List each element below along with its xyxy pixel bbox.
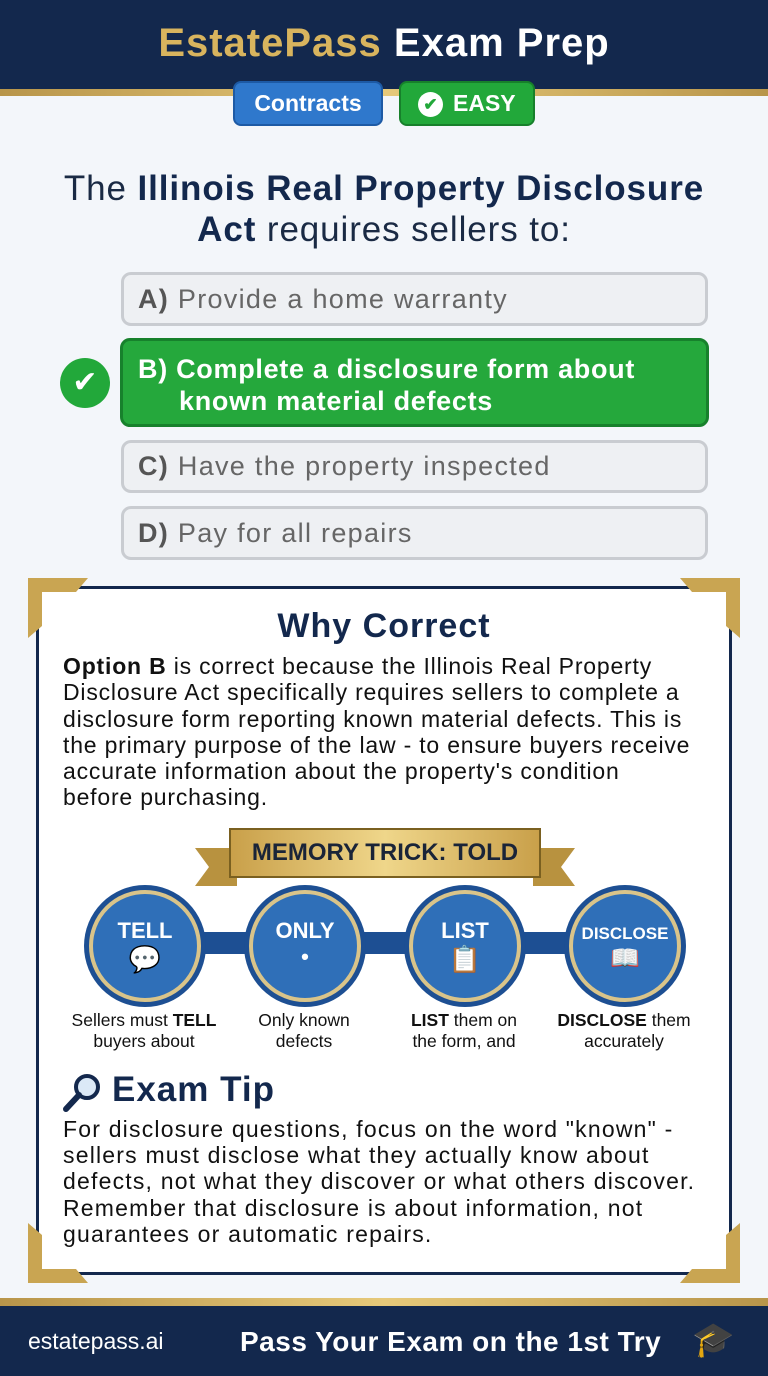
text: DISCLOSE them: [557, 1010, 691, 1030]
explanation text: Disclosure Act specifically requires sellers to complete a: [63, 679, 680, 705]
circle: LIST: [409, 890, 521, 1002]
check icon: [60, 358, 110, 408]
circle: ONLY: •: [301, 944, 309, 969]
circle: DISCLOSE: 📖: [610, 945, 640, 972]
badge: Contracts: [233, 81, 383, 126]
badge: EASY: ✔: [423, 95, 438, 114]
badge: EASY: EASY: [453, 90, 516, 116]
option B (correct): known material defects: [179, 386, 493, 416]
tip text: defects, not what they discover or what others discover.: [63, 1168, 695, 1194]
captions: Sellers must TELL: [72, 1010, 216, 1030]
check icon: ✔: [72, 366, 98, 399]
option C: [121, 440, 708, 493]
option D: D): [138, 518, 169, 548]
tip text: For disclosure questions, focus on the word "known" -: [63, 1116, 673, 1142]
heading: Exam Tip: Exam Tip: [112, 1070, 275, 1109]
heading: Why Correct: Why Correct: [277, 607, 491, 645]
explanation text: disclosure form reporting known material defects. This is: [63, 706, 682, 732]
title: EstatePass Exam Prep: [158, 21, 610, 65]
option C: Have the property inspected: [178, 451, 551, 481]
circle: ONLY: ONLY: [275, 918, 335, 943]
circle: TELL: 💬: [129, 944, 161, 974]
text: defects: [276, 1031, 332, 1051]
question: [64, 169, 704, 249]
text: accurately: [584, 1031, 664, 1051]
explanation text: Option B is correct because the Illinois Real Property: [63, 653, 652, 679]
icon: graduation cap: 🎓: [692, 1321, 734, 1359]
explanation text: accurate information about the property's condition: [63, 758, 620, 784]
gold corners: [28, 578, 740, 1283]
option D: [121, 506, 708, 560]
icon: magnifier: [63, 1074, 100, 1112]
option A: Provide a home warranty: [178, 284, 508, 314]
explanation text: before purchasing.: [63, 784, 268, 810]
option A: [121, 272, 708, 326]
explanation text: the primary purpose of the law - to ensure buyers receive: [63, 732, 690, 758]
option B (correct): [120, 338, 709, 427]
tip text: guarantees or automatic repairs.: [63, 1221, 433, 1247]
text: the form, and: [412, 1031, 516, 1051]
footer: [0, 1298, 768, 1376]
footer url: estatepass.ai: [28, 1328, 164, 1354]
text: LIST them on: [411, 1010, 517, 1030]
circle: ONLY: [249, 890, 361, 1002]
circle: DISCLOSE: [569, 890, 681, 1002]
option C: C): [138, 451, 169, 481]
circle: DISCLOSE: DISCLOSE: [582, 924, 668, 943]
circle: TELL: [89, 890, 201, 1002]
panel: explanation: [28, 578, 740, 1283]
footer slogan: Pass Your Exam on the 1st Try: [240, 1326, 661, 1357]
captions: [72, 1010, 216, 1051]
tip text: [63, 1116, 695, 1247]
ribbon: memory trick: MEMORY TRICK: TOLD: [252, 839, 518, 866]
question: Act requires sellers to:: [197, 210, 571, 249]
badge: Contracts: Contracts: [254, 90, 362, 116]
option B (correct): B) Complete a disclosure form about: [138, 354, 635, 384]
text: Only known: [258, 1010, 350, 1030]
explanation text: [63, 653, 690, 810]
option A: A): [138, 284, 169, 314]
question: The Illinois Real Property Disclosure: [64, 169, 704, 208]
captions: buyers about: [93, 1031, 195, 1051]
header band: [0, 0, 768, 90]
circle: TELL: TELL: [118, 918, 172, 943]
connector: [150, 932, 620, 954]
ribbon: memory trick: [195, 828, 575, 886]
tip text: Remember that disclosure is about information, not: [63, 1195, 643, 1221]
badge: EASY: [399, 81, 535, 126]
option D: Pay for all repairs: [178, 518, 413, 548]
circle: LIST: LIST: [441, 918, 489, 943]
tip text: sellers must disclose what they actually know about: [63, 1142, 650, 1168]
circle: LIST: 📋: [449, 944, 481, 974]
